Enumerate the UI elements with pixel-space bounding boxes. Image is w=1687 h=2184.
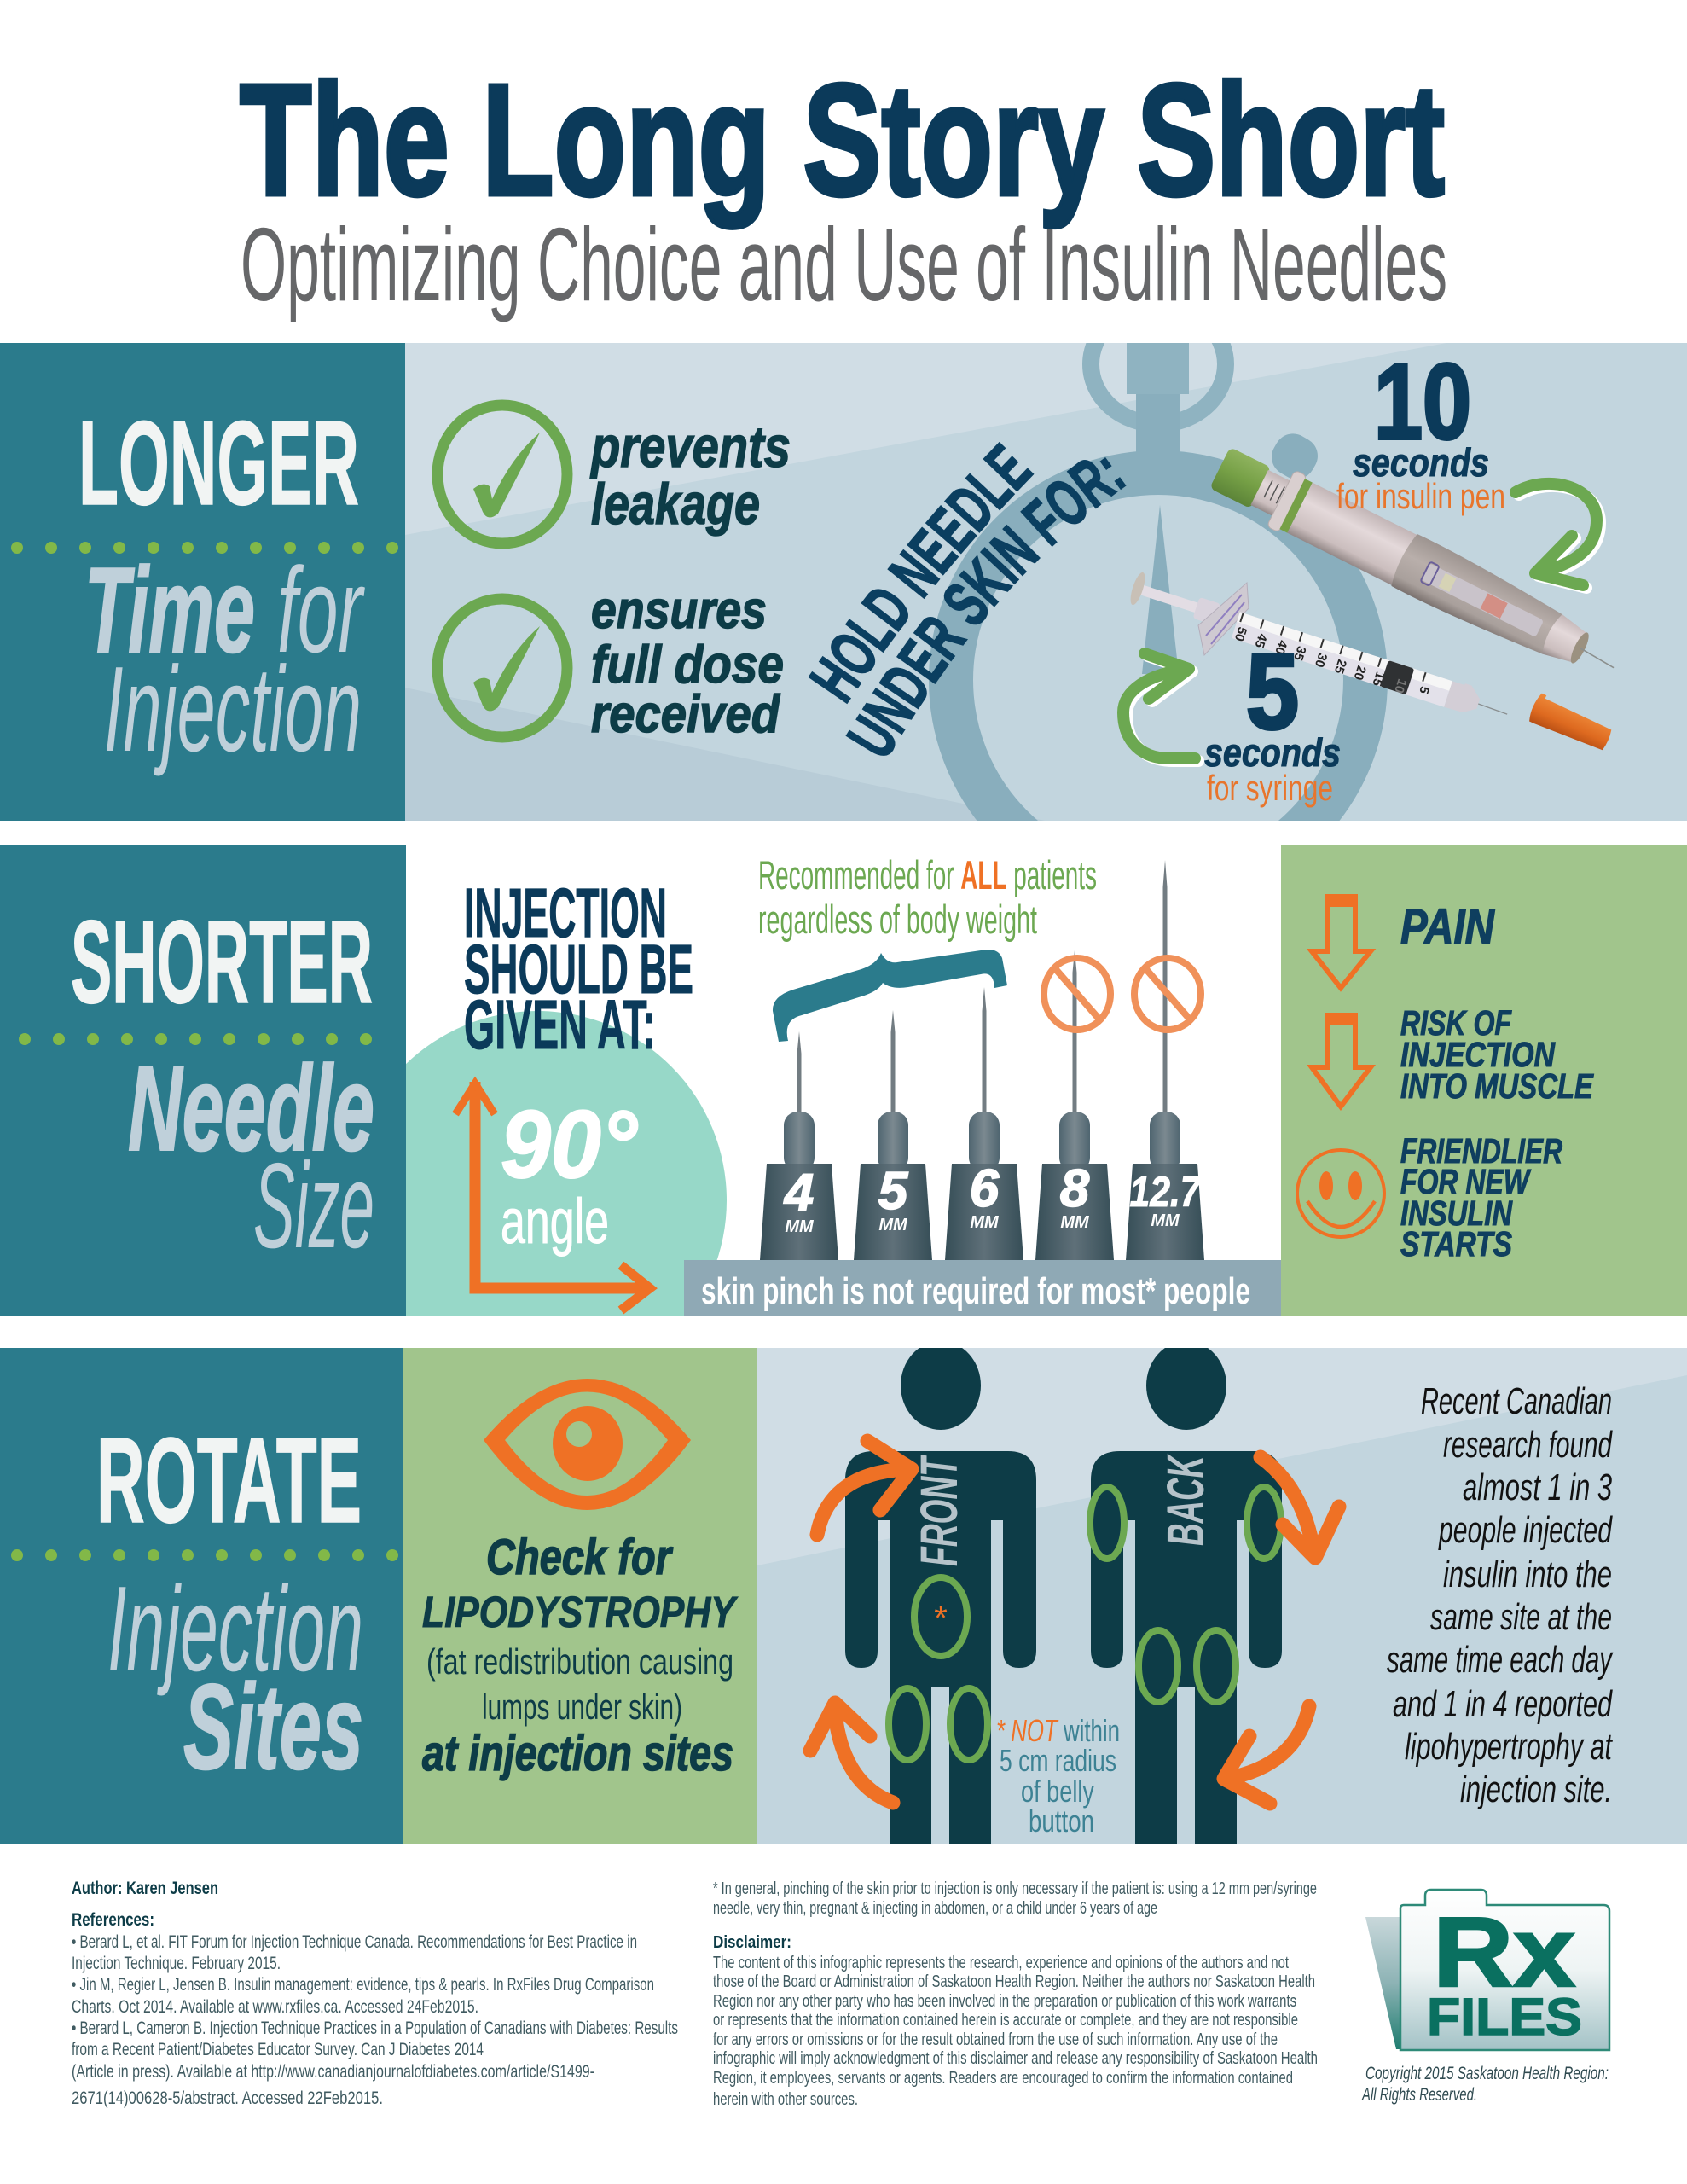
needle 5 mm	[854, 1010, 932, 1260]
footer: author and references: from a Recent Patient/Diabetes Educator Survey. Can J Diabetes 2014	[72, 2040, 484, 2059]
disclaimer	[713, 1933, 1318, 2109]
illustration: syringe: 20	[1351, 664, 1369, 682]
section 2 label block: Needle	[128, 1041, 374, 1176]
disclaimer: Region nor any other party who has been involved in the preparation or publication of this work warrants	[713, 1992, 1296, 2011]
section 1 label block: LONGER	[78, 396, 359, 530]
disclaimer: Region, it employees, servants or agents. Readers are encouraged to confirm the information contained	[713, 2069, 1293, 2088]
arrow: rotate front shoulder	[817, 1441, 912, 1535]
research text: insulin into the	[1443, 1554, 1612, 1595]
note: not within 5 cm of belly button: 5 cm radius	[1000, 1743, 1116, 1778]
illustration: syringe: 10	[1391, 677, 1409, 695]
heading: injection should be given at: SHOULD BE	[464, 931, 693, 1008]
needle 8 mm	[1035, 950, 1114, 1260]
research text: research found	[1443, 1424, 1613, 1466]
benefit: risk of injection into muscle	[1400, 1003, 1594, 1106]
arrow: rotate back thigh	[1224, 1706, 1309, 1804]
needle 8 mm: MM	[1060, 1213, 1090, 1232]
benefit text: ensures full dose received	[591, 581, 784, 744]
benefit: pain: PAIN	[1400, 899, 1495, 955]
benefit: friendlier for new insulin starts: FRIENDLIER	[1400, 1131, 1562, 1170]
arrow: rotate front thigh	[810, 1703, 893, 1803]
illustration: syringe: 45	[1252, 631, 1270, 649]
lipodystrophy text: Check for	[486, 1530, 674, 1585]
arrow: green curved syringe	[1123, 653, 1198, 761]
needle 4 mm: 4	[783, 1164, 814, 1223]
illustration: insulin pen	[1206, 439, 1629, 694]
illustration: syringe: 40	[1272, 638, 1290, 656]
research text: almost 1 in 3	[1463, 1467, 1612, 1508]
stat: 10 seconds for insulin pen: 10	[1374, 343, 1471, 462]
needle 12.7 mm: MM	[1151, 1211, 1180, 1230]
disclaimer: for any errors or omissions or for the result obtained from the use of such information. Any use of the	[713, 2030, 1278, 2049]
icon: eye	[484, 1379, 691, 1510]
footer: author and references: Author: Karen Jensen	[72, 1879, 218, 1898]
section 1 label block: Injection	[104, 642, 362, 777]
logo: rx files folder	[1365, 1890, 1609, 2050]
footer: author and references	[72, 1879, 678, 2108]
icon: down arrow pain	[1312, 894, 1371, 988]
benefit: friendlier for new insulin starts: FOR NEW	[1400, 1162, 1532, 1201]
illustration: syringe: 15	[1369, 670, 1388, 688]
disclaimer: those of the Board or Administration of Saskatoon Health Region. Neither the authors nor Saskatoon Health	[713, 1972, 1315, 1991]
arrow: rotate back shoulder	[1261, 1457, 1339, 1558]
stat: 5 seconds for syringe: 5	[1246, 633, 1299, 752]
needle 8 mm: 8	[1060, 1159, 1090, 1218]
copyright: All Rights Reserved.	[1361, 2085, 1477, 2105]
illustration: syringe: 30	[1312, 651, 1330, 669]
needle 5 mm: 5	[878, 1162, 909, 1221]
footer: author and references: • Berard L, et al. FIT Forum for Injection Technique Canada. Recommendations for Best Practice in	[72, 1932, 637, 1952]
icon: check mark 2	[438, 599, 567, 737]
needle 5 mm: MM	[878, 1216, 908, 1234]
benefit text: ensures full dose received: full dose	[591, 636, 784, 694]
label: 90 degree angle: angle	[501, 1186, 609, 1257]
footer: author and references: References:	[72, 1910, 154, 1930]
illustration: syringe: 25	[1331, 658, 1349, 676]
lipodystrophy text: lumps under skin)	[482, 1687, 682, 1727]
needle 6 mm: 6	[970, 1159, 1000, 1218]
footer: author and references: • Berard L, Cameron B. Injection Technique Practices in a Population of Canadians with Diabetes: Results	[72, 2018, 678, 2038]
note: not within 5 cm of belly button	[996, 1713, 1120, 1838]
figure: front: FRONT	[910, 1455, 968, 1566]
footer: author and references: Injection Technique. February 2015.	[72, 1954, 281, 1973]
benefit: risk of injection into muscle: RISK OF	[1400, 1003, 1512, 1043]
benefit text: ensures full dose received: received	[591, 685, 780, 744]
icon: smiley	[1297, 1150, 1384, 1237]
panel: rotate injection sites	[0, 1341, 1687, 1844]
needle 12.7 mm	[1126, 860, 1204, 1260]
disclaimer: or represents that the information contained herein is accurate or complete, and they are not responsible	[713, 2011, 1298, 2030]
skin pinch banner: skin pinch is not required for most* people	[701, 1270, 1250, 1312]
section 3 label block: Injection	[107, 1561, 363, 1697]
note: not within 5 cm of belly button: button	[1029, 1804, 1094, 1838]
stat: 10 seconds for insulin pen: for insulin pen	[1336, 476, 1505, 516]
skin pinch banner	[684, 1260, 1281, 1316]
footnote: skin pinching	[713, 1879, 1317, 1918]
logo: rx files folder: Rx	[1433, 1896, 1575, 2007]
section 1 label block: for	[277, 543, 365, 678]
lipodystrophy text: at injection sites	[422, 1726, 733, 1781]
figure: front: *	[934, 1600, 948, 1637]
figure: back	[1090, 1341, 1282, 1844]
heading: injection should be given at: GIVEN AT:	[464, 986, 656, 1064]
green benefits panel	[1281, 845, 1687, 1316]
benefit text: prevents leakage: leakage	[591, 472, 760, 537]
stat: 5 seconds for syringe: for syringe	[1207, 768, 1333, 808]
heading: injection should be given at: INJECTION	[464, 874, 667, 952]
footer: author and references: 2671(14)00628-5/abstract. Accessed 22Feb2015.	[72, 2088, 383, 2108]
icon: prohibited 12.7 mm	[1134, 958, 1201, 1030]
icon: down arrow risk	[1312, 1013, 1371, 1107]
icon: prohibited 8 mm	[1044, 958, 1110, 1030]
illustration: syringe: 50	[1232, 625, 1249, 643]
recommendation text: Recommended for ALL patients	[758, 852, 1097, 897]
footer: author and references: (Article in press). Available at http://www.canadianjournalofdiabetes.com/article/S1499-	[72, 2062, 594, 2082]
figure: front	[845, 1341, 1036, 1844]
figure: back: BACK	[1157, 1454, 1215, 1546]
logo: rx files folder: FILES	[1427, 1988, 1582, 2046]
section 2 label block: SHORTER	[71, 897, 373, 1028]
illustration: syringe: 5	[1416, 684, 1432, 695]
illustration: syringe	[1128, 571, 1512, 727]
stat: 5 seconds for syringe: seconds	[1204, 730, 1341, 775]
label: 90 degree angle	[501, 1091, 638, 1257]
footnote: skin pinching: * In general, pinching of the skin prior to injection is only necessary if the patient is: using a 12 mm pen/syringe	[713, 1879, 1317, 1898]
section 3 label block: Sites	[183, 1659, 363, 1795]
recommendation text	[758, 852, 1097, 942]
stat: 10 seconds for insulin pen: seconds	[1353, 440, 1489, 485]
disclaimer: Disclaimer:	[713, 1933, 791, 1952]
research text: injection site.	[1460, 1769, 1612, 1810]
curved heading: hold needle under skin for: HOLD NEEDLE	[809, 442, 1034, 705]
section 1 label block: Time	[84, 543, 255, 678]
research text	[1387, 1380, 1614, 1810]
heading: injection should be given at	[464, 874, 693, 1064]
icon: right-angle arrows	[455, 1082, 650, 1310]
icon: stopwatch	[951, 305, 1365, 887]
arrow: green curved pen	[1516, 484, 1600, 588]
benefit: friendlier for new insulin starts: INSULIN	[1400, 1194, 1513, 1233]
disclaimer: infographic will imply acknowledgment of this disclaimer and release any responsibility of Saskatoon Health	[713, 2049, 1318, 2068]
needle 4 mm	[760, 1031, 838, 1260]
section 2 label block	[0, 845, 406, 1316]
icon: check mark 1	[438, 405, 567, 543]
label: 90 degree angle: 90°	[501, 1091, 638, 1198]
lipodystrophy panel	[403, 1348, 757, 1844]
footnote: skin pinching: needle, very thin, pregnant & injecting in abdomen, or a child under 6 years of age	[713, 1899, 1157, 1918]
section 3 label block: ROTATE	[96, 1413, 362, 1548]
note: not within 5 cm of belly button: of belly	[1021, 1774, 1094, 1809]
benefit: risk of injection into muscle: INJECTION	[1400, 1035, 1556, 1074]
benefit text: prevents leakage: prevents	[589, 415, 791, 479]
illustration: syringe: 35	[1290, 644, 1308, 662]
stat: 10 seconds for insulin pen	[1336, 343, 1505, 516]
recommendation text: regardless of body weight	[758, 897, 1037, 942]
footer: author and references: Charts. Oct 2014. Available at www.rxfiles.ca. Accessed 24Feb2015.	[72, 1997, 478, 2017]
disclaimer: The content of this infographic represents the research, experience and opinions of the authors and not	[713, 1954, 1289, 1972]
research text: people injected	[1438, 1509, 1613, 1551]
copyright	[1361, 2064, 1609, 2105]
benefit text: ensures full dose received: ensures	[591, 581, 767, 640]
curved heading: hold needle under skin for: UNDER SKIN FOR:	[846, 457, 1126, 756]
panel: longer time for injection	[0, 343, 1687, 821]
teal angle circle	[406, 1011, 727, 1316]
needle 12.7 mm: 12.7	[1129, 1168, 1202, 1216]
needle 6 mm	[945, 987, 1023, 1260]
section 1 background	[405, 343, 1687, 821]
lipodystrophy text	[422, 1530, 738, 1781]
disclaimer: herein with other sources.	[713, 2090, 858, 2109]
benefit: friendlier for new insulin starts	[1400, 1131, 1562, 1263]
needle 6 mm: MM	[970, 1213, 1000, 1232]
illustration: orange needle cap	[1527, 692, 1615, 754]
section 3 label block	[0, 1348, 403, 1844]
footer: author and references: • Jin M, Regier L, Jensen B. Insulin management: evidence, tips & pearls. In RxFiles Drug Comparison	[72, 1975, 654, 1995]
benefit text: prevents leakage	[589, 415, 791, 537]
section 2 label block: Size	[253, 1138, 374, 1274]
lipodystrophy text: (fat redistribution causing	[426, 1641, 733, 1682]
panel: shorter needle size	[0, 845, 1687, 1316]
body diagram background	[757, 1348, 1687, 1844]
bracket	[773, 950, 1007, 1042]
needle 4 mm: MM	[785, 1217, 815, 1236]
benefit: risk of injection into muscle: INTO MUSCLE	[1400, 1066, 1594, 1106]
lipodystrophy text: LIPODYSTROPHY	[422, 1588, 738, 1636]
note: not within 5 cm of belly button: * NOT within	[996, 1713, 1120, 1748]
benefit: friendlier for new insulin starts: STARTS	[1400, 1224, 1512, 1263]
stat: 5 seconds for syringe	[1204, 633, 1341, 808]
section 1 label block	[0, 343, 405, 821]
